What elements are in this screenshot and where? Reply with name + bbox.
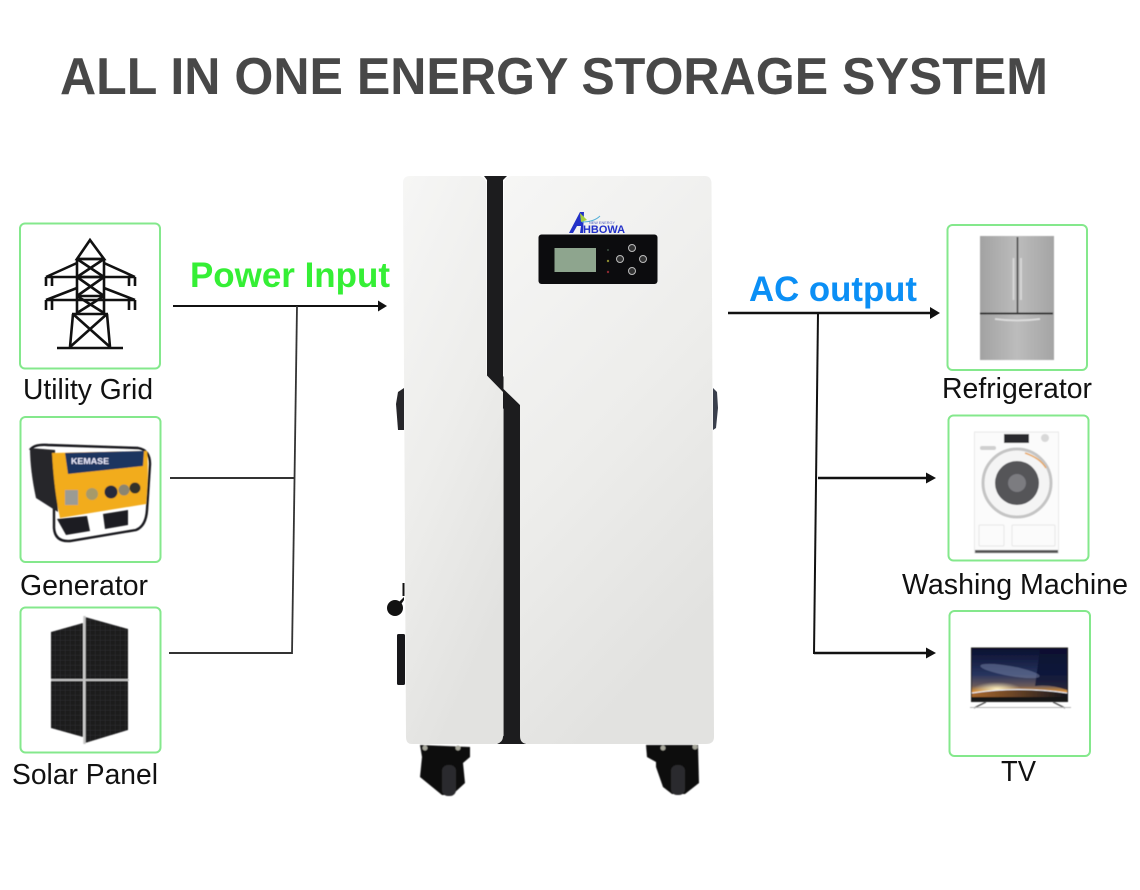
arrow: AC output wiring <box>728 307 940 658</box>
side knob <box>387 583 404 616</box>
heading: AC output: AC output <box>749 270 917 309</box>
card: utility grid <box>20 224 160 368</box>
left side handle <box>396 388 404 430</box>
label: generator: Generator <box>20 570 148 602</box>
card: washing machine <box>948 416 1088 560</box>
LCD screen <box>554 248 596 272</box>
control buttons <box>616 244 646 274</box>
logo: HBOWA <box>569 212 625 236</box>
icon: washing machine <box>974 432 1058 553</box>
label: washing machine: Washing Machine <box>902 569 1128 601</box>
arrow: power input wiring <box>169 300 387 654</box>
icon: generator <box>30 445 150 541</box>
logo: HBOWA: HBOWA <box>583 224 625 236</box>
label: refrigerator: Refrigerator <box>942 373 1092 405</box>
icon: solar panel <box>51 616 129 744</box>
icon: transmission tower <box>46 240 135 348</box>
panel: power sources <box>12 224 160 791</box>
panel: AC loads <box>902 225 1128 788</box>
status LEDs <box>607 249 609 251</box>
card: generator <box>20 417 160 562</box>
icon: refrigerator <box>980 236 1054 360</box>
label: TV: TV <box>1001 756 1036 788</box>
label: solar panel: Solar Panel <box>12 759 158 791</box>
label: utility grid: Utility Grid <box>23 374 153 406</box>
card: solar panel <box>20 608 160 752</box>
right side handle <box>713 388 718 430</box>
left wheel <box>420 745 470 796</box>
left door panel <box>403 176 503 744</box>
card: TV <box>950 611 1090 756</box>
card: refrigerator <box>948 225 1087 370</box>
panel: energy storage cabinet <box>387 176 718 796</box>
side connector <box>397 634 405 685</box>
black centre strip <box>484 176 526 744</box>
right door panel <box>504 176 714 744</box>
icon: generator: KEMASE <box>71 457 110 466</box>
logo: HBOWA: NEW ENERGY <box>589 221 616 225</box>
icon: TV <box>970 648 1071 708</box>
right wheel <box>646 744 699 795</box>
control panel <box>538 234 658 284</box>
heading: power input: Power Input <box>190 256 390 295</box>
title: ALL IN ONE ENERGY STORAGE SYSTEM <box>60 47 1048 105</box>
